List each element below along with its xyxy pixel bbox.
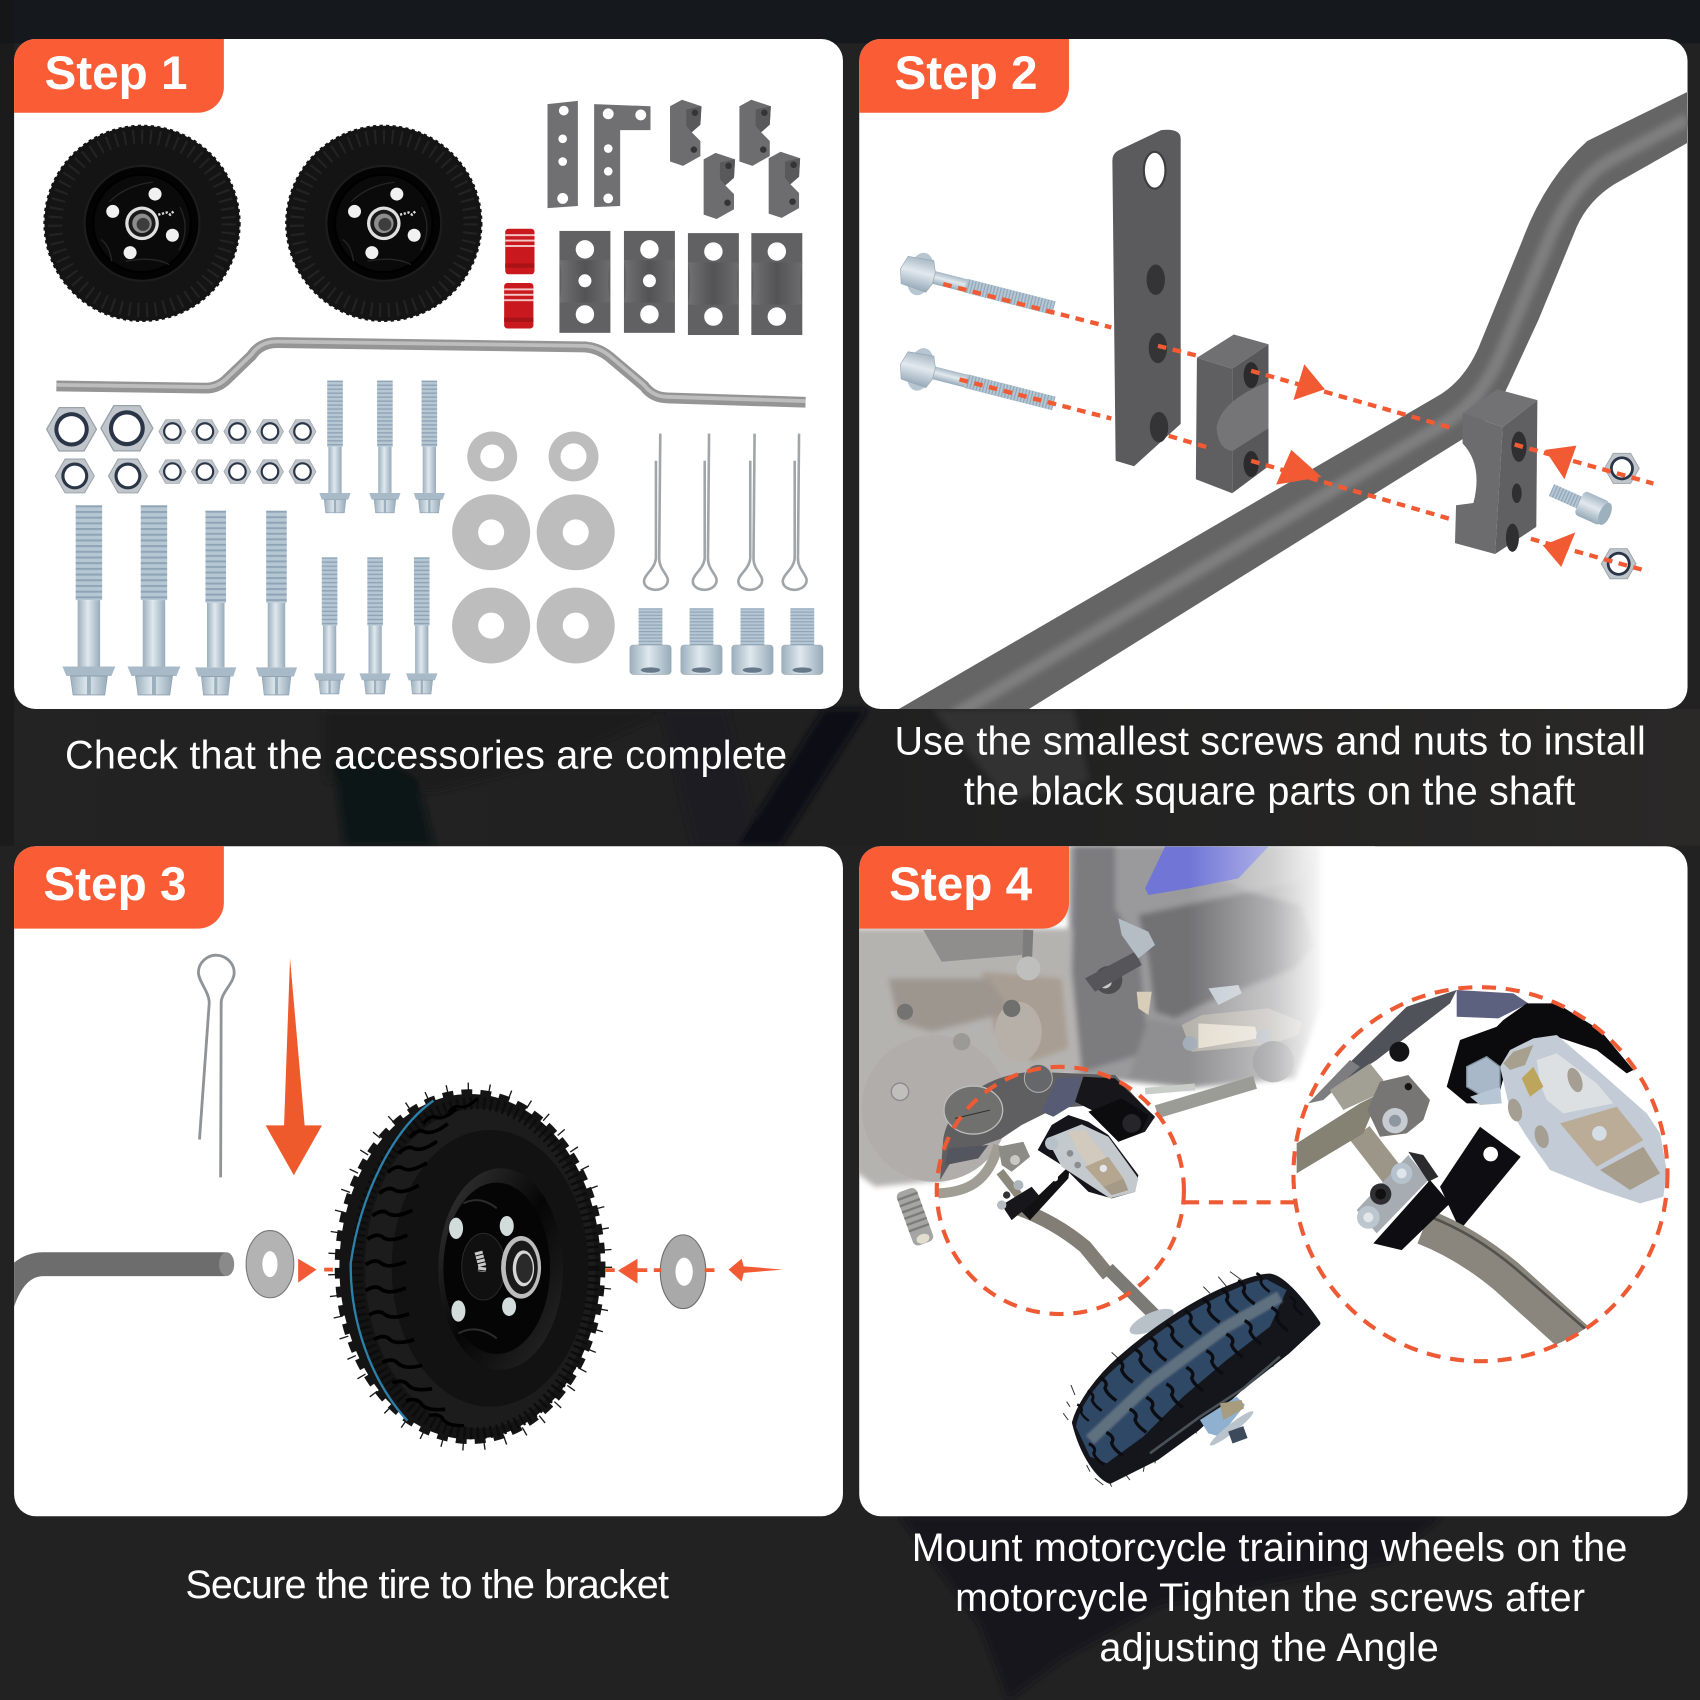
icon: clamp block right [1455,389,1537,554]
caption: step 1: Check that the accessories are complete [65,734,787,778]
icon: small clamp blocks [670,100,800,219]
arrows: right side [605,1259,783,1284]
icon: bar tip [219,1252,234,1276]
icon: cotter pins [644,434,807,590]
icon: washers [452,432,615,664]
icon: left washer [246,1231,294,1298]
caption: step 2: the black square parts on the shaft [964,769,1575,813]
caption: step 4 [912,1526,1627,1670]
panel: step 1 [14,39,843,709]
icon: long plate [1112,130,1181,466]
tab: step 2: Step 2 [894,47,1038,100]
icon: cotter pin [198,955,234,1177]
tab: step 3: Step 3 [43,858,186,911]
icon: nuts and screw [1546,453,1639,579]
panel: step 4 [855,842,1688,1516]
icon: long bolts [895,248,1059,424]
caption: step 4: motorcycle Tighten the screws after [955,1576,1585,1620]
callout: dashed circles [937,987,1667,1361]
tab: step 4 [859,846,1069,929]
arrows: assembly guides [943,284,1653,571]
icon: flat plates [548,101,651,208]
icon: half clamps [559,231,802,335]
icon: clamp block left [1196,334,1268,493]
icon: right washer [660,1235,706,1309]
tab: step 1 [14,39,224,113]
icon: wheels [44,126,481,321]
icon: lock nuts [47,406,316,493]
icon: red valve caps [504,229,535,329]
icon: wheel [333,1087,607,1446]
icon: tube to wheel [1108,1268,1156,1316]
caption: step 4: Mount motorcycle training wheels on the [912,1526,1627,1570]
icon: socket screws [630,608,823,674]
caption: step 2: Use the smallest screws and nuts to install [894,720,1646,764]
tab: step 3 [14,846,224,929]
tab: step 1: Step 1 [44,47,188,100]
icon: curved shaft [899,92,1687,716]
icon: training wheel [1063,1272,1317,1487]
caption: step 3: Secure the tire to the bracket [185,1563,669,1607]
panel: step 2 [859,39,1688,716]
photo: faded motorcycle [855,842,1375,1275]
tab: step 2 [859,39,1069,113]
icon: bar end [0,1264,226,1312]
arrow: down [266,958,322,1175]
icon: axle bar [56,342,806,402]
icon: flange bolts [62,381,445,695]
photo: enlarged detail [1297,990,1667,1340]
caption: step 2 [894,720,1646,813]
caption: step 4: adjusting the Angle [1099,1626,1439,1670]
tab: step 4: Step 4 [889,858,1033,911]
arrow: left washer to wheel [298,1259,336,1283]
panel: step 3 [0,846,843,1516]
